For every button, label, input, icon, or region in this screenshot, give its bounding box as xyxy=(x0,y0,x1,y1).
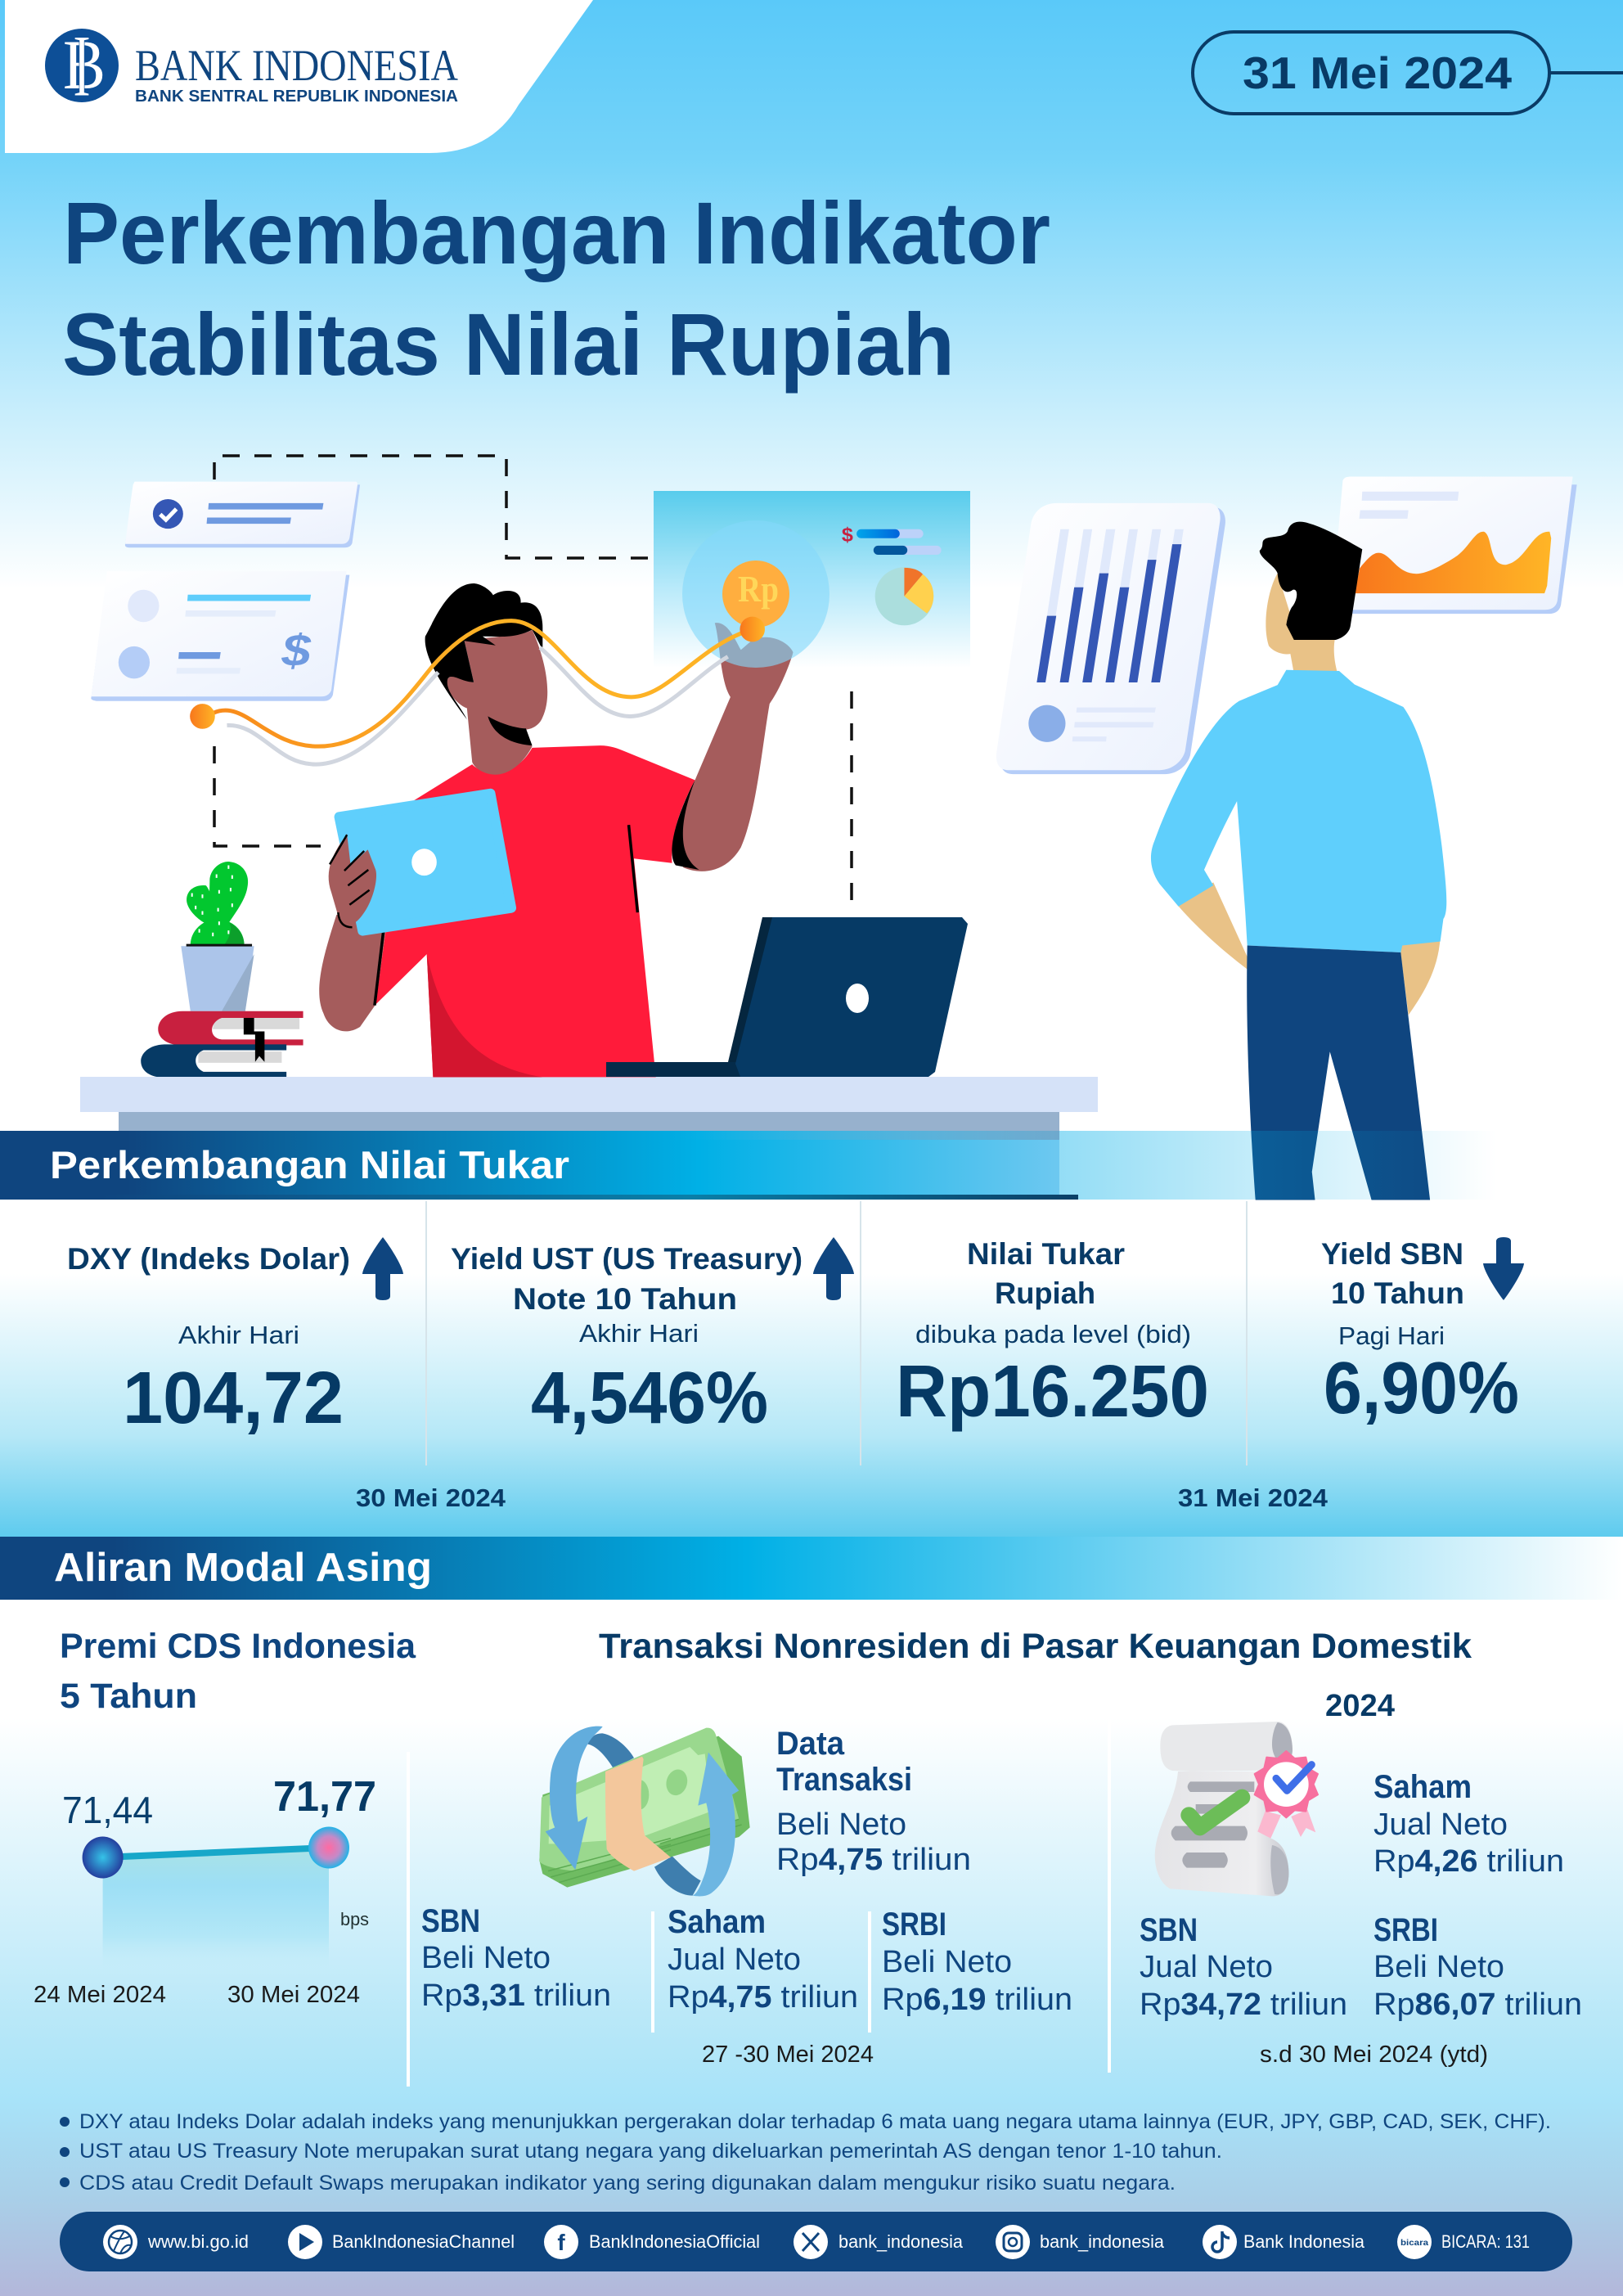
footer contact bar xyxy=(60,2212,1572,2271)
mini chart inside backdrop: $ xyxy=(842,524,853,546)
books xyxy=(141,1011,303,1078)
indicator: Yield SBN: 6,90% xyxy=(1324,1348,1519,1429)
date label: 30 Mei 2024: 30 Mei 2024 xyxy=(356,1483,506,1512)
block: ytd SBN: Jual Neto xyxy=(1140,1950,1273,1984)
header: Bank Indonesia logo block xyxy=(5,0,593,153)
dashed connector lines xyxy=(214,456,852,904)
CDS line chart: 71,44 xyxy=(62,1789,153,1831)
raised arm xyxy=(676,623,793,871)
indicator: DXY: DXY (Indeks Dolar) xyxy=(67,1242,350,1276)
block: weekly SBN: SBN xyxy=(421,1903,480,1939)
head xyxy=(447,630,547,775)
date label: 31 Mei 2024: 31 Mei 2024 xyxy=(1178,1483,1329,1512)
footer contact bar: bank_indonesia xyxy=(1040,2231,1165,2252)
block: ytd SRBI: SRBI xyxy=(1373,1912,1438,1948)
date label: year to date: s.d 30 Mei 2024 (ytd) xyxy=(1260,2042,1488,2068)
tablet xyxy=(339,794,511,931)
explanatory notes: CDS atau Credit Default Swaps merupakan indikator yang sering digunakan dalam mengukur risiko suatu negara. xyxy=(79,2172,1176,2195)
indicator: Yield SBN: Yield SBN xyxy=(1321,1237,1463,1271)
icon: money with arrows xyxy=(539,1727,750,1896)
rear ring segments xyxy=(587,1733,634,1769)
panel: CDS premium xyxy=(34,1627,416,2008)
date pill xyxy=(1193,32,1623,114)
date pill: 31 Mei 2024 xyxy=(1243,47,1512,98)
explanatory notes: UST atau US Treasury Note merupakan surat utang negara yang dikeluarkan pemerintah AS dengan tenor 1-10 tahun. xyxy=(79,2140,1222,2163)
indicator: Nilai Tukar Rupiah: Rupiah xyxy=(995,1276,1095,1310)
rupiah coin: Rp xyxy=(738,568,779,610)
block: weekly Saham: Saham xyxy=(668,1904,766,1940)
area chart card xyxy=(1332,476,1577,614)
block: weekly SBN: Beli Neto xyxy=(421,1941,551,1975)
indicator: DXY: 104,72 xyxy=(123,1357,344,1439)
title: Perkembangan Indikator xyxy=(63,183,1050,282)
ribbons xyxy=(1257,1810,1315,1839)
block: weekly SRBI: SRBI xyxy=(882,1907,946,1943)
indicator: Yield SBN xyxy=(1321,1237,1524,1429)
heading: nonresident transactions: Transaksi Nonresiden di Pasar Keuangan Domestik xyxy=(599,1627,1472,1666)
blue shirt xyxy=(1151,670,1446,952)
logo emblem: I xyxy=(73,16,91,115)
CDS line chart: bps xyxy=(340,1909,369,1929)
heading bar: Aliran Modal Asing xyxy=(0,1537,1623,1600)
CDS heading: 5 Tahun xyxy=(60,1677,197,1716)
sky background xyxy=(0,0,1623,1200)
block: ytd SRBI xyxy=(1373,1912,1582,2022)
explanatory notes: DXY atau Indeks Dolar adalah indeks yang menunjukkan pergerakan dolar terhadap 6 mata uang negara utama lainnya (EUR, JPY, GBP, CAD, SEK, CHF). xyxy=(79,2110,1551,2133)
indicator: Yield SBN: 10 Tahun xyxy=(1331,1276,1464,1310)
block: ytd SRBI: Rp86,07 triliun xyxy=(1373,1988,1582,2022)
footer contact bar: bank_indonesia xyxy=(838,2231,964,2252)
block: ytd SBN: SBN xyxy=(1140,1912,1198,1948)
heading bar: Aliran Modal Asing: Aliran Modal Asing xyxy=(54,1546,432,1590)
block: weekly SRBI: Beli Neto xyxy=(882,1945,1012,1979)
hand on tablet xyxy=(329,834,376,925)
indicator: Nilai Tukar Rupiah xyxy=(896,1237,1209,1433)
icon: facebook: f xyxy=(557,2230,565,2255)
CDS heading: Premi CDS Indonesia xyxy=(60,1627,416,1666)
block: weekly Saham: Rp4,75 triliun xyxy=(668,1980,858,2015)
CDS heading xyxy=(60,1627,416,1716)
block: weekly transaction data: Beli Neto xyxy=(776,1808,906,1842)
rupiah coin xyxy=(722,560,789,628)
man with tablet xyxy=(319,583,793,1077)
exchange rate panel background xyxy=(0,1200,1623,1537)
pot xyxy=(181,946,254,1011)
icon: website xyxy=(103,2225,137,2259)
block: weekly transaction data: Rp4,75 triliun xyxy=(776,1843,971,1877)
block: ytd Saham: Jual Neto xyxy=(1373,1808,1508,1842)
block: weekly SRBI: Rp6,19 triliun xyxy=(882,1983,1072,2017)
arrow up xyxy=(813,1237,854,1300)
footer contact bar: BICARA: 131 xyxy=(1441,2231,1530,2252)
hair xyxy=(425,583,542,719)
block: weekly SBN: Rp3,31 triliun xyxy=(421,1979,611,2013)
logo white tab xyxy=(5,0,593,153)
block: ytd Saham xyxy=(1373,1769,1564,1879)
mini chart inside backdrop xyxy=(842,524,942,625)
title: Stabilitas Nilai Rupiah xyxy=(62,295,955,394)
paper body xyxy=(1155,1772,1288,1896)
icon: certificate scroll xyxy=(1155,1722,1318,1896)
icon: bicara: bicara xyxy=(1400,2239,1428,2248)
icon: X xyxy=(794,2225,828,2259)
CDS line chart xyxy=(34,1773,376,2008)
footer contact bar: www.bi.go.id xyxy=(147,2231,249,2252)
paper band xyxy=(605,1757,671,1871)
trend curves xyxy=(190,617,765,764)
footer contact bar: BankIndonesiaChannel xyxy=(332,2231,515,2252)
indicator: DXY xyxy=(67,1237,403,1439)
logo emblem: B xyxy=(63,25,106,104)
block: weekly transaction data: Data xyxy=(776,1726,845,1762)
block: ytd Saham: Saham xyxy=(1373,1769,1472,1805)
heading bar: Perkembangan Nilai Tukar: Perkembangan Nilai Tukar xyxy=(50,1143,569,1186)
indicator: DXY: Akhir Hari xyxy=(178,1321,299,1349)
block: weekly Saham: Jual Neto xyxy=(668,1943,801,1977)
top roll xyxy=(1160,1722,1293,1772)
indicator: Nilai Tukar Rupiah: Rp16.250 xyxy=(896,1351,1209,1433)
capital flow panel background xyxy=(0,1600,1623,2296)
hair xyxy=(1260,522,1362,640)
indicator: Yield UST: Note 10 Tahun xyxy=(513,1282,737,1316)
panel: rupiah coin backdrop xyxy=(654,491,970,668)
logo tagline: BANK SENTRAL REPUBLIK INDONESIA xyxy=(135,88,458,106)
indicator: Yield UST xyxy=(451,1237,854,1439)
text lines xyxy=(1171,1781,1254,1868)
arrow up xyxy=(362,1237,403,1300)
down arrow xyxy=(546,1727,603,1870)
beard xyxy=(488,716,533,745)
man looking at charts xyxy=(1151,522,1446,1200)
footer contact bar: Bank Indonesia xyxy=(1243,2231,1365,2252)
rosette badge xyxy=(1255,1751,1318,1817)
column dividers xyxy=(425,1201,1248,1465)
indicator: Nilai Tukar Rupiah: dibuka pada level (bid) xyxy=(915,1320,1191,1348)
logo emblem xyxy=(45,16,119,115)
block: ytd SRBI: Beli Neto xyxy=(1373,1950,1504,1984)
section dividers xyxy=(407,1712,1111,2087)
up arrow xyxy=(693,1753,739,1896)
CDS line chart: 30 Mei 2024 xyxy=(227,1982,360,2008)
hands xyxy=(1176,882,1248,970)
potted cactus on books xyxy=(141,862,303,1078)
banknote stack xyxy=(539,1736,750,1888)
block: weekly Saham xyxy=(668,1904,858,2015)
CDS line chart: 24 Mei 2024 xyxy=(34,1982,166,2008)
explanatory notes xyxy=(60,2110,1551,2195)
title xyxy=(62,183,1050,394)
block: weekly transaction data: Transaksi xyxy=(776,1762,912,1798)
logo wordmark: BANK INDONESIA xyxy=(135,41,458,90)
tall bar chart card xyxy=(996,503,1225,774)
block: ytd Saham: Rp4,26 triliun xyxy=(1373,1844,1564,1879)
block: weekly SRBI xyxy=(882,1907,1072,2017)
icon: tiktok xyxy=(1203,2225,1237,2259)
icon: facebook xyxy=(544,2225,578,2259)
CDS line chart: 71,77 xyxy=(273,1773,376,1821)
icon: instagram xyxy=(996,2225,1030,2259)
block: ytd SBN: Rp34,72 triliun xyxy=(1140,1988,1347,2022)
trousers xyxy=(1247,945,1430,1200)
card: dollar summary xyxy=(91,571,349,701)
indicator: Nilai Tukar Rupiah: Nilai Tukar xyxy=(967,1237,1125,1271)
block: weekly transaction data xyxy=(776,1726,971,1877)
block: ytd SBN xyxy=(1140,1912,1347,2022)
indicator: Yield UST: Akhir Hari xyxy=(579,1319,699,1348)
desk xyxy=(80,1077,1098,1145)
laptop xyxy=(606,917,968,1077)
cactus xyxy=(187,862,248,945)
heading bar: Perkembangan Nilai Tukar xyxy=(0,1131,1497,1200)
indicator: Yield UST: Yield UST (US Treasury) xyxy=(451,1242,803,1276)
illustration: analysts with charts xyxy=(80,456,1577,1200)
left forearm xyxy=(319,915,386,1031)
rupiah glow circle xyxy=(682,520,829,668)
icon: video channel xyxy=(288,2225,322,2259)
card: dollar summary: $ xyxy=(281,625,312,675)
arrow down xyxy=(1483,1237,1524,1300)
icon: bicara xyxy=(1397,2225,1432,2259)
year label 2024: 2024 xyxy=(1325,1689,1395,1723)
red shirt xyxy=(375,745,695,1077)
date label: weekly range: 27 -30 Mei 2024 xyxy=(702,2042,874,2068)
footer contact bar: BankIndonesiaOfficial xyxy=(589,2231,760,2252)
block: weekly SBN xyxy=(421,1903,611,2013)
shirt shadow xyxy=(427,954,542,1077)
green check xyxy=(1189,1798,1242,1827)
indicator: Yield SBN: Pagi Hari xyxy=(1338,1321,1445,1350)
card: checklist xyxy=(125,482,360,547)
face and neck xyxy=(1266,574,1338,673)
indicator: Yield UST: 4,546% xyxy=(531,1357,768,1439)
